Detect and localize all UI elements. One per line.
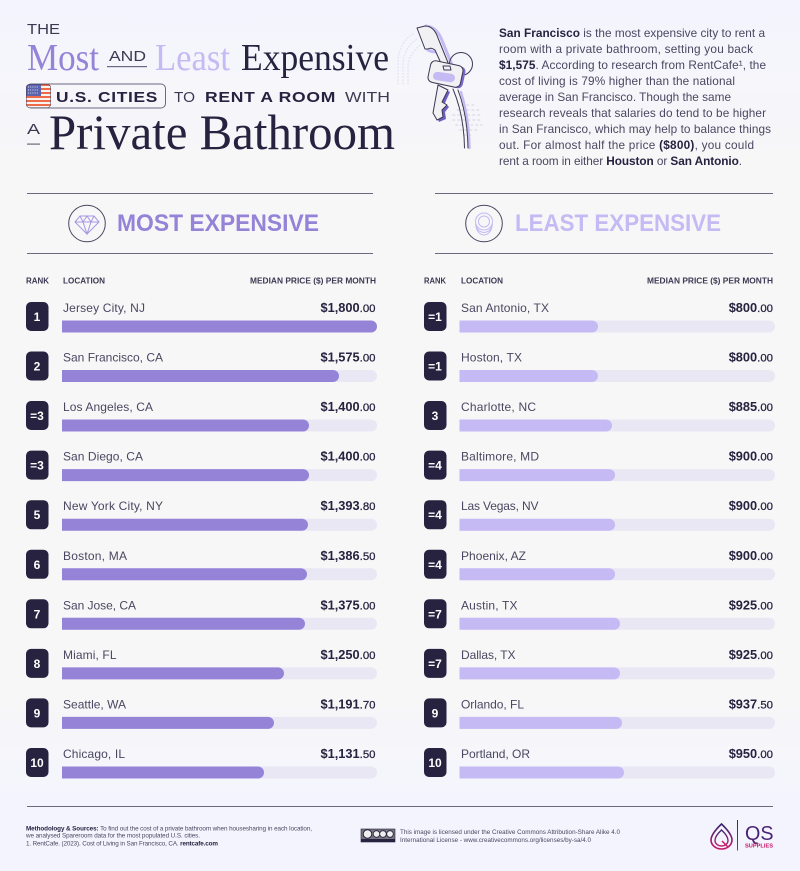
row: Las Vegas: $900.00 xyxy=(729,498,773,513)
row: Jersey City: $1,800.00 xyxy=(321,300,376,315)
intro line 5: average in San Francisco. Though the same xyxy=(499,90,731,104)
column headers: RANK xyxy=(424,276,446,286)
methodology and sources: we analysed Spareroom data for the most populated U.S. cities. xyxy=(25,832,200,840)
row: Los Angeles: =3 xyxy=(30,409,44,423)
row: Hoston xyxy=(424,350,775,382)
title: Private Bathroom xyxy=(49,104,395,160)
intro line 6: research reveals that salaries do tend to be higher xyxy=(499,106,766,120)
title: WITH xyxy=(345,90,390,106)
row: Phoenix xyxy=(424,548,775,580)
row: New York City: New York City, NY xyxy=(63,499,163,513)
row: Baltimore: Baltimore, MD xyxy=(461,450,539,464)
row: Dallas xyxy=(424,647,775,679)
row: Hoston: =1 xyxy=(428,360,442,374)
title: THE xyxy=(27,21,60,38)
row: Las Vegas: Las Vegas, NV xyxy=(461,499,538,513)
intro line 4: cost of living is 79% higher than the national xyxy=(499,74,735,88)
row: San Jose: $1,375.00 xyxy=(321,597,376,612)
row: Dallas: Dallas, TX xyxy=(461,648,516,662)
row: Jersey City xyxy=(26,300,377,332)
row: San Diego: San Diego, CA xyxy=(63,450,143,464)
row: Portland: 10 xyxy=(428,756,442,770)
row: Jersey City: 1 xyxy=(34,310,41,324)
methodology and sources: Methodology & Sources: To find out the cost of a private bathroom when housesharing in each location, xyxy=(26,826,312,832)
intro line 8: out. For almost half the price ($800), you could xyxy=(499,138,754,152)
row: Las Vegas xyxy=(424,498,775,531)
row: San Francisco xyxy=(26,350,377,382)
row: Chicago: $1,131.50 xyxy=(321,746,376,761)
row: Austin: $925.00 xyxy=(729,597,773,612)
title: Least xyxy=(155,37,230,79)
row: Miami: 8 xyxy=(34,657,41,671)
row: Orlando: $937.50 xyxy=(729,696,773,711)
row: Austin xyxy=(424,597,775,630)
icon: US flag xyxy=(26,84,51,108)
intro line 9: rent a room in either Houston or San Antonio. xyxy=(499,154,742,168)
column headers: MEDIAN PRICE ($) PER MONTH xyxy=(250,276,376,286)
icon: key with lanyard xyxy=(398,26,483,148)
row: San Diego xyxy=(26,449,377,481)
panel: least expensive xyxy=(424,193,775,778)
row: Charlotte xyxy=(424,399,775,432)
row: Jersey City: Jersey City, NJ xyxy=(63,301,145,315)
column headers: LOCATION xyxy=(63,276,105,286)
row: Baltimore xyxy=(424,449,775,481)
row: San Francisco: San Francisco, CA xyxy=(63,350,163,364)
row: Orlando: Orlando, FL xyxy=(461,697,524,711)
logo: QS Supplies xyxy=(711,820,774,850)
column headers: LOCATION xyxy=(461,276,503,286)
row: New York City xyxy=(26,498,377,531)
row: Boston: $1,386.50 xyxy=(321,548,376,563)
row: San Diego: =3 xyxy=(30,459,44,473)
row: San Antonio xyxy=(424,300,775,332)
pill: U.S. cities with flag xyxy=(26,84,166,108)
row: San Francisco: $1,575.00 xyxy=(321,350,376,364)
row: Chicago: Chicago, IL xyxy=(63,747,125,761)
column headers xyxy=(26,276,376,286)
icon: coins xyxy=(466,205,502,242)
title xyxy=(26,21,395,160)
row: Los Angeles: Los Angeles, CA xyxy=(63,400,153,414)
methodology and sources: 1. RentCafe. (2023). Cost of Living in San Francisco, CA. rentcafe.com xyxy=(26,840,218,848)
row: Dallas: $925.00 xyxy=(729,647,773,662)
column headers: MEDIAN PRICE ($) PER MONTH xyxy=(647,276,773,286)
icon: diamond xyxy=(69,205,105,242)
methodology and sources xyxy=(25,826,312,848)
row: New York City: $1,393.80 xyxy=(321,498,376,513)
row: Hoston: $800.00 xyxy=(729,350,773,364)
row: Seattle: 9 xyxy=(34,706,41,720)
license text xyxy=(400,829,620,844)
row: Portland: Portland, OR xyxy=(461,747,530,761)
row: Baltimore: =4 xyxy=(428,459,442,473)
row: San Francisco: 2 xyxy=(34,360,41,374)
icon: creative commons badge xyxy=(361,829,395,842)
row: Orlando xyxy=(424,696,775,729)
logo: QS Supplies: QS xyxy=(745,823,774,845)
column headers: RANK xyxy=(26,276,49,286)
row: San Jose xyxy=(26,597,377,630)
row: Charlotte: Charlotte, NC xyxy=(461,400,536,414)
row: Chicago xyxy=(26,746,377,778)
row: San Antonio: San Antonio, TX xyxy=(461,301,549,315)
row: San Diego: $1,400.00 xyxy=(321,449,376,464)
row: Austin: =7 xyxy=(428,607,442,621)
row: Seattle: Seattle, WA xyxy=(63,697,126,711)
row: Miami: Miami, FL xyxy=(63,648,117,662)
row: Orlando: 9 xyxy=(432,706,439,720)
intro line 3: $1,575. According to research from RentCafe¹, the xyxy=(499,58,766,72)
row: Charlotte: $885.00 xyxy=(729,399,773,414)
row: Phoenix: Phoenix, AZ xyxy=(461,549,526,563)
row: Phoenix: =4 xyxy=(428,558,442,572)
logo: QS Supplies: SUPPLIES xyxy=(745,844,773,850)
row: Austin: Austin, TX xyxy=(461,598,518,612)
panel: most expensive xyxy=(26,193,377,778)
row: Boston xyxy=(26,548,377,580)
title: RENT A ROOM xyxy=(205,89,336,106)
row: Chicago: 10 xyxy=(30,756,44,770)
row: San Antonio: =1 xyxy=(428,310,442,324)
intro line 7: in San Francisco, which may help to balance things xyxy=(499,122,771,136)
heading: least expensive: LEAST EXPENSIVE xyxy=(515,210,721,237)
row: Portland: $950.00 xyxy=(729,746,773,761)
row: Dallas: =7 xyxy=(428,657,442,671)
row: Los Angeles xyxy=(26,399,377,432)
row: Las Vegas: =4 xyxy=(428,508,442,522)
title: TO xyxy=(174,90,195,106)
row: Los Angeles: $1,400.00 xyxy=(321,399,376,414)
pill: U.S. cities with flag: U.S. CITIES xyxy=(56,89,158,106)
row: San Jose: 7 xyxy=(34,607,41,621)
row: Charlotte: 3 xyxy=(432,409,439,423)
heading: most expensive: MOST EXPENSIVE xyxy=(117,210,319,237)
row: Boston: 6 xyxy=(34,558,41,572)
column headers xyxy=(424,276,773,286)
row: New York City: 5 xyxy=(34,508,41,522)
title: AND xyxy=(109,49,146,65)
row: San Jose: San Jose, CA xyxy=(63,598,136,612)
row: Seattle: $1,191.70 xyxy=(321,696,376,711)
row: San Antonio: $800.00 xyxy=(729,300,773,315)
title: Most xyxy=(27,37,99,79)
title: Expensive xyxy=(241,37,389,79)
row: Seattle xyxy=(26,696,377,729)
row: Portland xyxy=(424,746,775,778)
row: Phoenix: $900.00 xyxy=(729,548,773,563)
license text: International License - www.creativecommons.org/licenses/by-sa/4.0 xyxy=(400,837,591,844)
intro paragraph: San Francisco is the most expensive city to rent a xyxy=(499,26,765,40)
intro line 2: room with a private bathroom, setting you back xyxy=(499,42,753,56)
row: Miami: $1,250.00 xyxy=(321,647,376,662)
row: Miami xyxy=(26,647,377,679)
license text: This image is licensed under the Creative Commons Attribution-Share Alike 4.0 xyxy=(400,829,620,836)
title: A xyxy=(27,122,40,138)
row: Baltimore: $900.00 xyxy=(729,449,773,464)
row: Hoston: Hoston, TX xyxy=(461,350,522,364)
row: Boston: Boston, MA xyxy=(63,549,127,563)
